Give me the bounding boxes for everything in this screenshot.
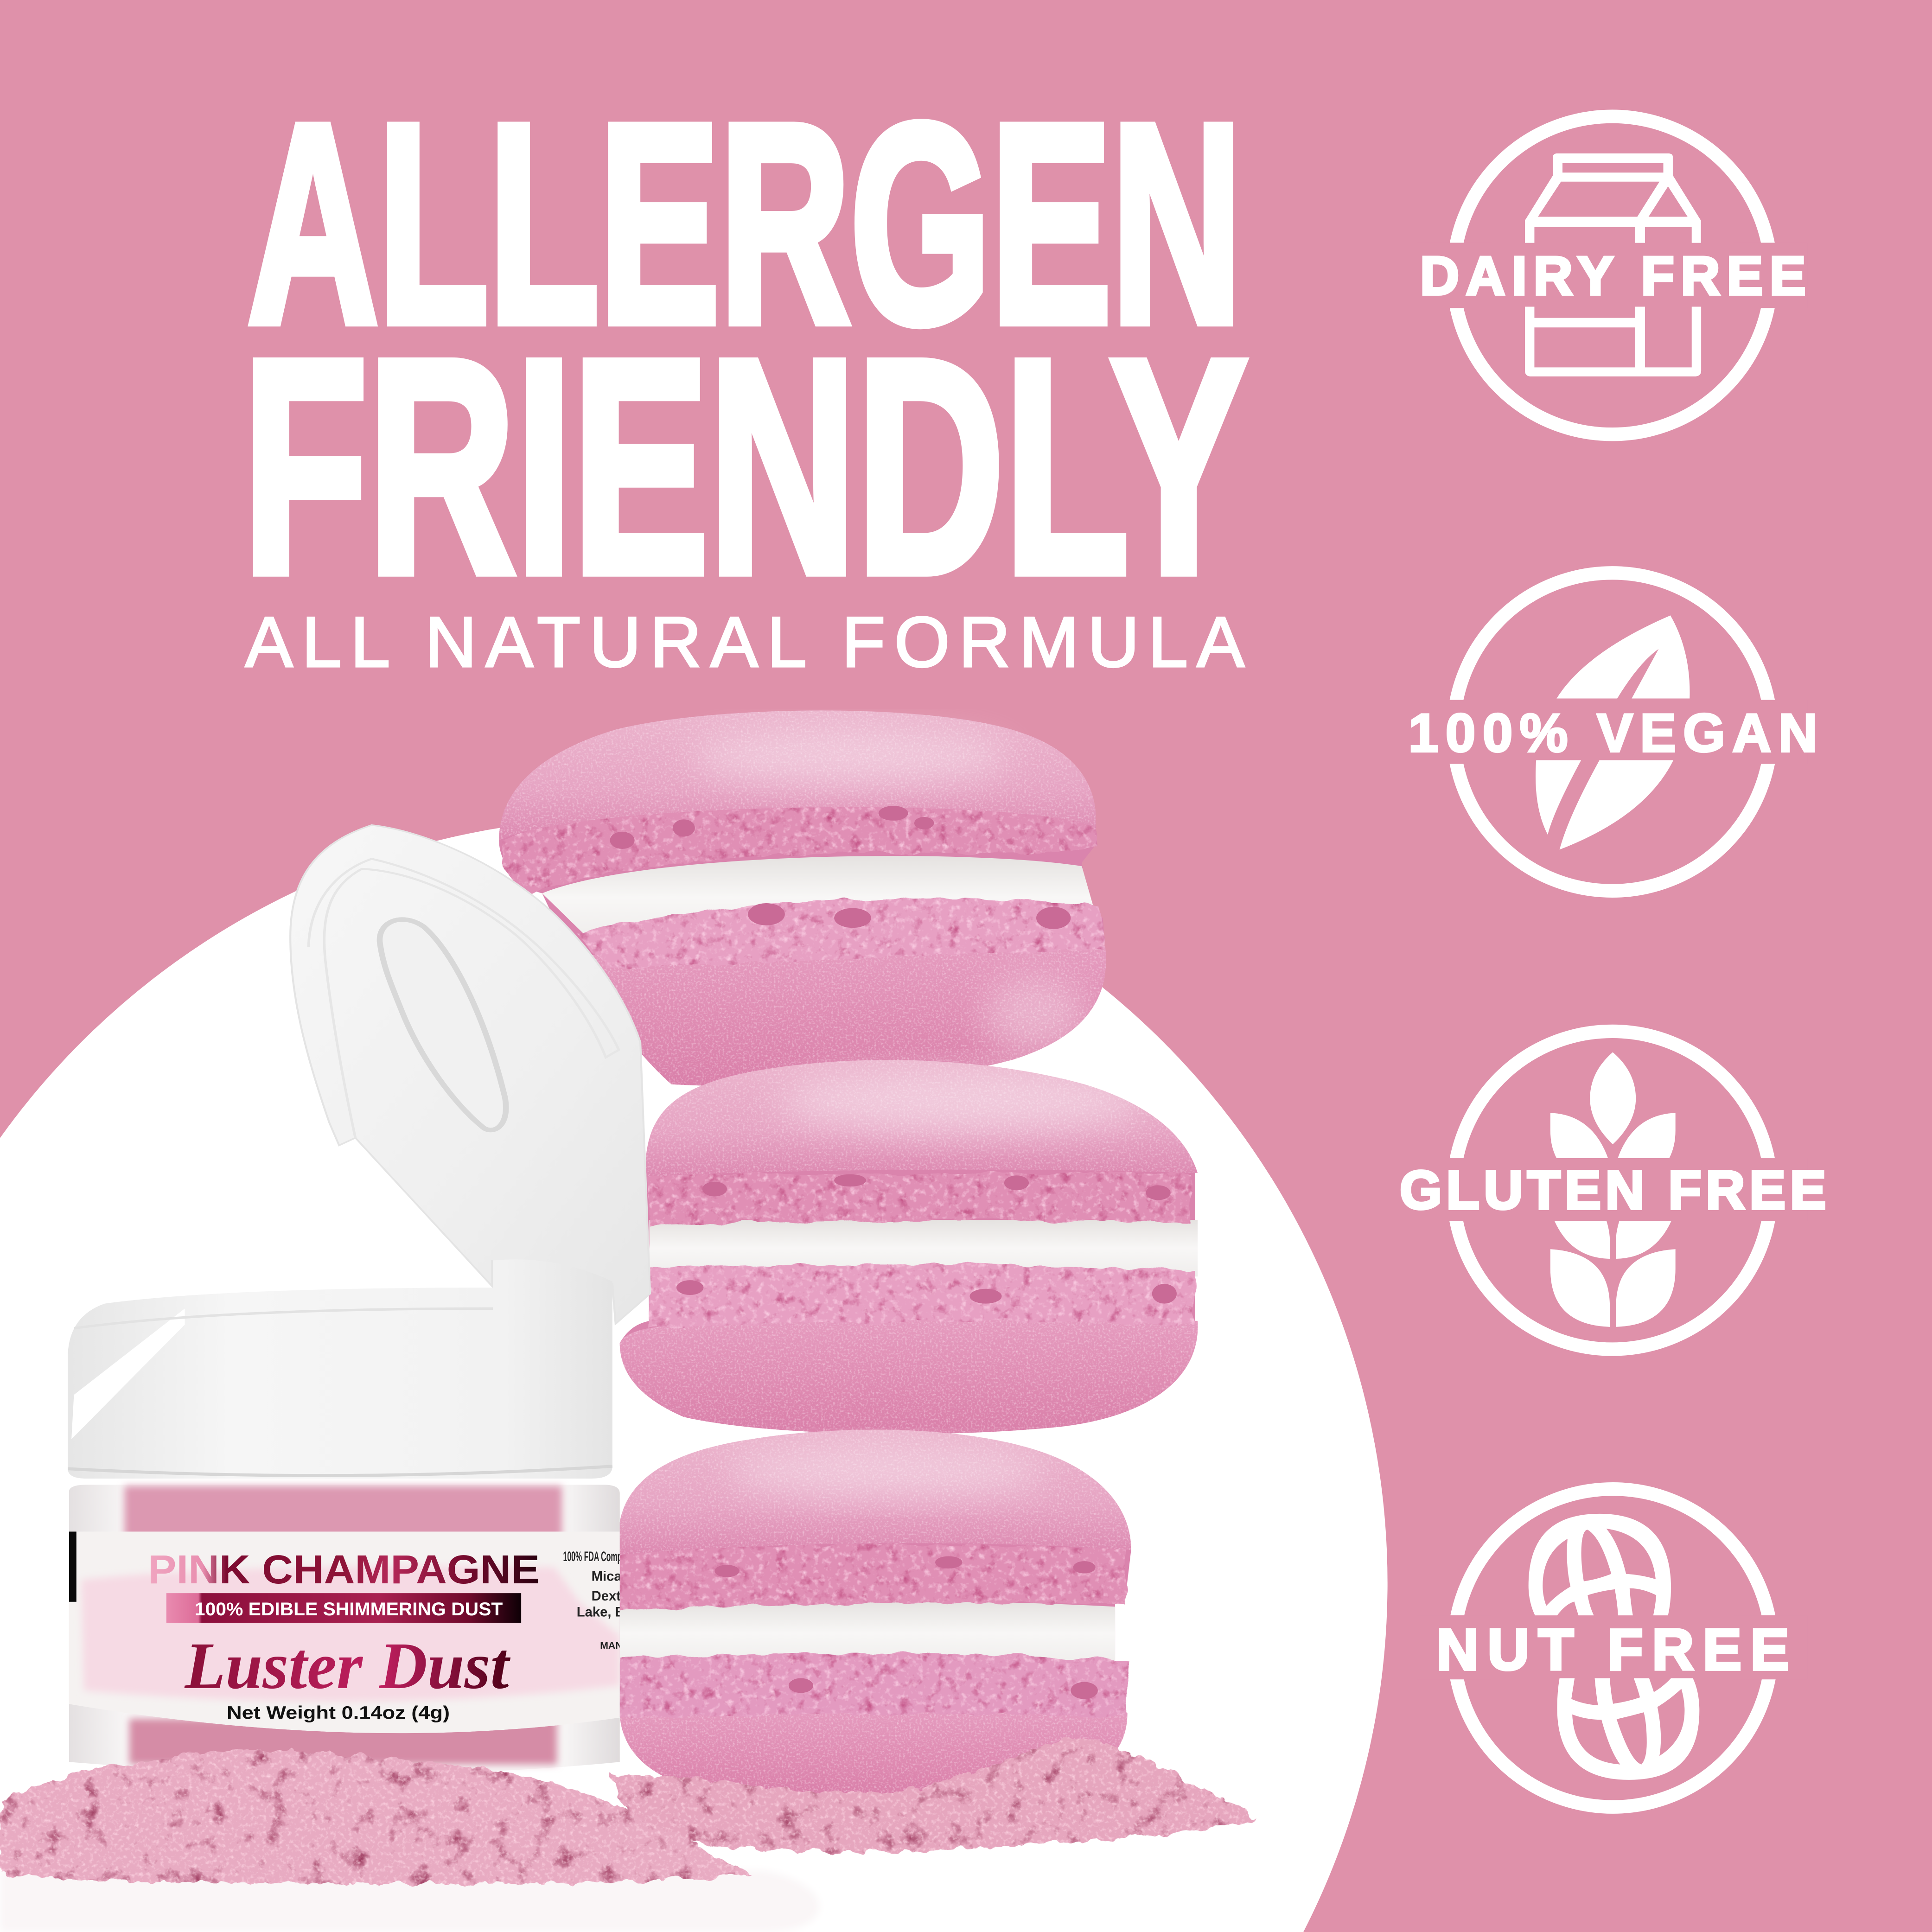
macaron: middle (620, 1060, 1198, 1434)
icon: globe (1529, 1514, 1699, 1780)
product name: PINK CHAMPAGNE (148, 1547, 540, 1592)
side panel text: Mica, (592, 1569, 625, 1584)
side panel text: MANUF (600, 1640, 636, 1651)
jar glass body (69, 1485, 620, 1774)
side panel text: Dextrose, (592, 1589, 653, 1604)
badge label: NUT FREE (1437, 1618, 1789, 1682)
foot air pockets (610, 806, 1071, 929)
tagline: 100% EDIBLE SHIMMERING DUST (195, 1599, 503, 1620)
badge label: 100% VEGAN (1409, 702, 1817, 763)
macaron: bottom (618, 1429, 1131, 1796)
powder in jar (124, 1486, 562, 1555)
open flip lid (290, 825, 650, 1324)
product script name: Luster Dust (184, 1629, 511, 1703)
lid inner recess (308, 859, 619, 1138)
tagline band (166, 1593, 521, 1623)
black edge mark (69, 1531, 77, 1602)
white circle backdrop (0, 818, 1388, 1932)
powder pile: foreground (0, 1749, 752, 1884)
icon: leaf (1536, 615, 1690, 850)
subtitle: ALL NATURAL FORMULA (245, 602, 1244, 682)
badge: nut free (1417, 1489, 1808, 1807)
badge label: GLUTEN FREE (1400, 1160, 1826, 1220)
lid finger groove (380, 919, 506, 1130)
foot air pockets (676, 1174, 1177, 1304)
title line: friendly: FRIENDLY (243, 297, 1247, 637)
side panel text (563, 1549, 656, 1651)
net weight: Net Weight 0.14oz (4g) (227, 1703, 450, 1723)
badge label: DAIRY FREE (1420, 245, 1806, 306)
icon: milk carton (1525, 153, 1701, 376)
icon: wheat (1550, 1052, 1676, 1327)
jar (68, 1259, 656, 1774)
macaron: top (499, 710, 1106, 1086)
badge: gluten free (1400, 1031, 1826, 1349)
title (243, 65, 1247, 682)
side panel text: Lake, Blue 2 (577, 1605, 656, 1620)
powder pile: behind macarons (610, 1737, 1257, 1852)
badge: dairy free (1417, 116, 1808, 434)
badge: 100% vegan (1409, 573, 1817, 891)
label brush wash (81, 1566, 620, 1702)
title line: allergen: ALLERGEN (248, 65, 1242, 382)
table surface (0, 1870, 819, 1932)
side panel text: 100% FDA Compliant (563, 1549, 637, 1564)
jar label (69, 1531, 656, 1733)
foot air pockets (714, 1556, 1098, 1699)
jar cap (68, 1259, 612, 1479)
